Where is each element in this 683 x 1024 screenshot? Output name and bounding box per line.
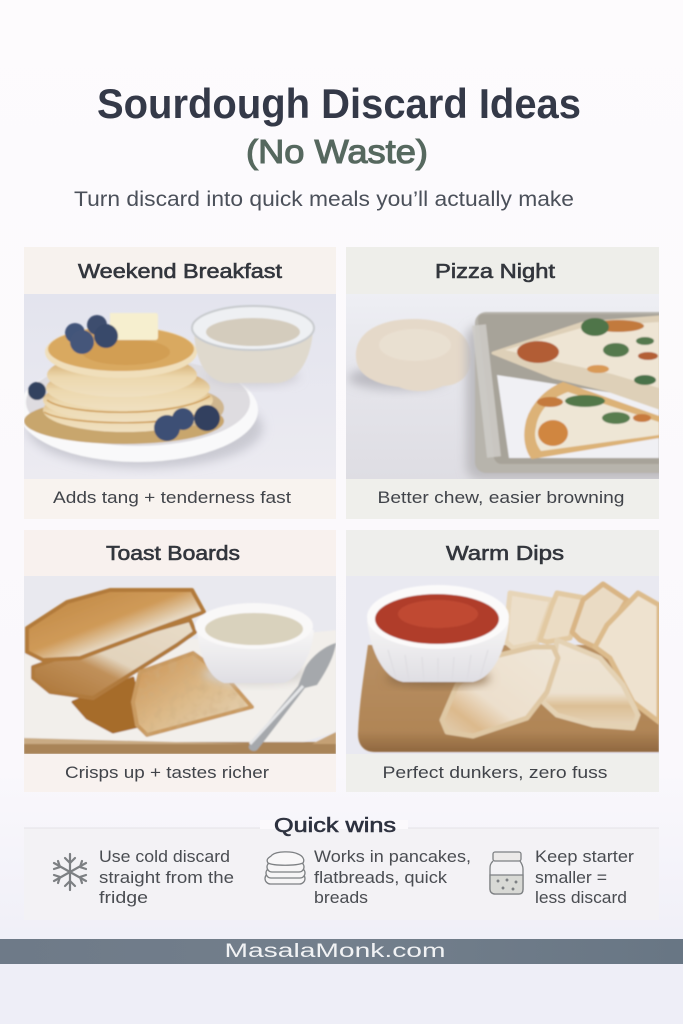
panel heading: Weekend Breakfast	[78, 261, 283, 283]
quick win text 2: breads	[314, 889, 368, 907]
panel: pizza night	[346, 247, 683, 519]
panel caption	[24, 479, 336, 519]
quick win text 1: Use cold discard	[99, 848, 230, 866]
panel heading: Warm Dips	[446, 543, 564, 565]
panel: quick wins	[24, 815, 659, 920]
footer brand text: MasalaMonk.com	[224, 941, 446, 962]
panel caption	[346, 479, 659, 519]
panel: warm dips: Perfect dunkers, zero fuss	[382, 763, 608, 782]
quick wins background	[24, 828, 659, 920]
icon: snowflake	[54, 854, 86, 890]
panel: toast boards	[24, 530, 336, 792]
quick wins heading: Quick wins	[274, 815, 396, 837]
panel header	[346, 247, 659, 294]
quick win text 3: smaller =	[535, 869, 607, 887]
icon: starter jar	[490, 852, 523, 894]
panel caption	[24, 754, 336, 792]
panel header	[24, 530, 336, 576]
panel heading: Toast Boards	[106, 543, 240, 565]
panel header	[24, 247, 336, 294]
photo: pancakes	[18, 294, 336, 479]
panel: toast boards: Crisps up + tastes richer	[65, 763, 269, 782]
photo: toast and spread	[24, 576, 336, 754]
quick win text 2: flatbreads, quick	[314, 869, 448, 887]
subtitle: (No Waste)	[246, 133, 428, 170]
tagline: Turn discard into quick meals you’ll actually make	[74, 188, 574, 211]
photo: dough and pizza	[346, 294, 683, 480]
quick win text 3: less discard	[535, 889, 627, 907]
panel: warm dips	[346, 530, 659, 792]
panel: weekend breakfast	[18, 247, 336, 519]
panel caption	[346, 754, 659, 792]
quick win text 1: straight from the	[99, 869, 234, 887]
photo: dip and bread	[346, 576, 659, 754]
panel: pizza night: Better chew, easier browning	[378, 488, 624, 507]
quick win text 2: Works in pancakes,	[314, 848, 471, 866]
footer bar	[0, 939, 683, 964]
quick win text 3: Keep starter	[535, 848, 635, 866]
panel: weekend breakfast: Adds tang + tenderness fast	[53, 488, 291, 507]
panel heading: Pizza Night	[435, 261, 556, 283]
quick win text 1: fridge	[99, 889, 148, 907]
title: Sourdough Discard Ideas	[97, 80, 581, 127]
icon: pancake stack	[265, 852, 305, 884]
panel header	[346, 530, 659, 576]
